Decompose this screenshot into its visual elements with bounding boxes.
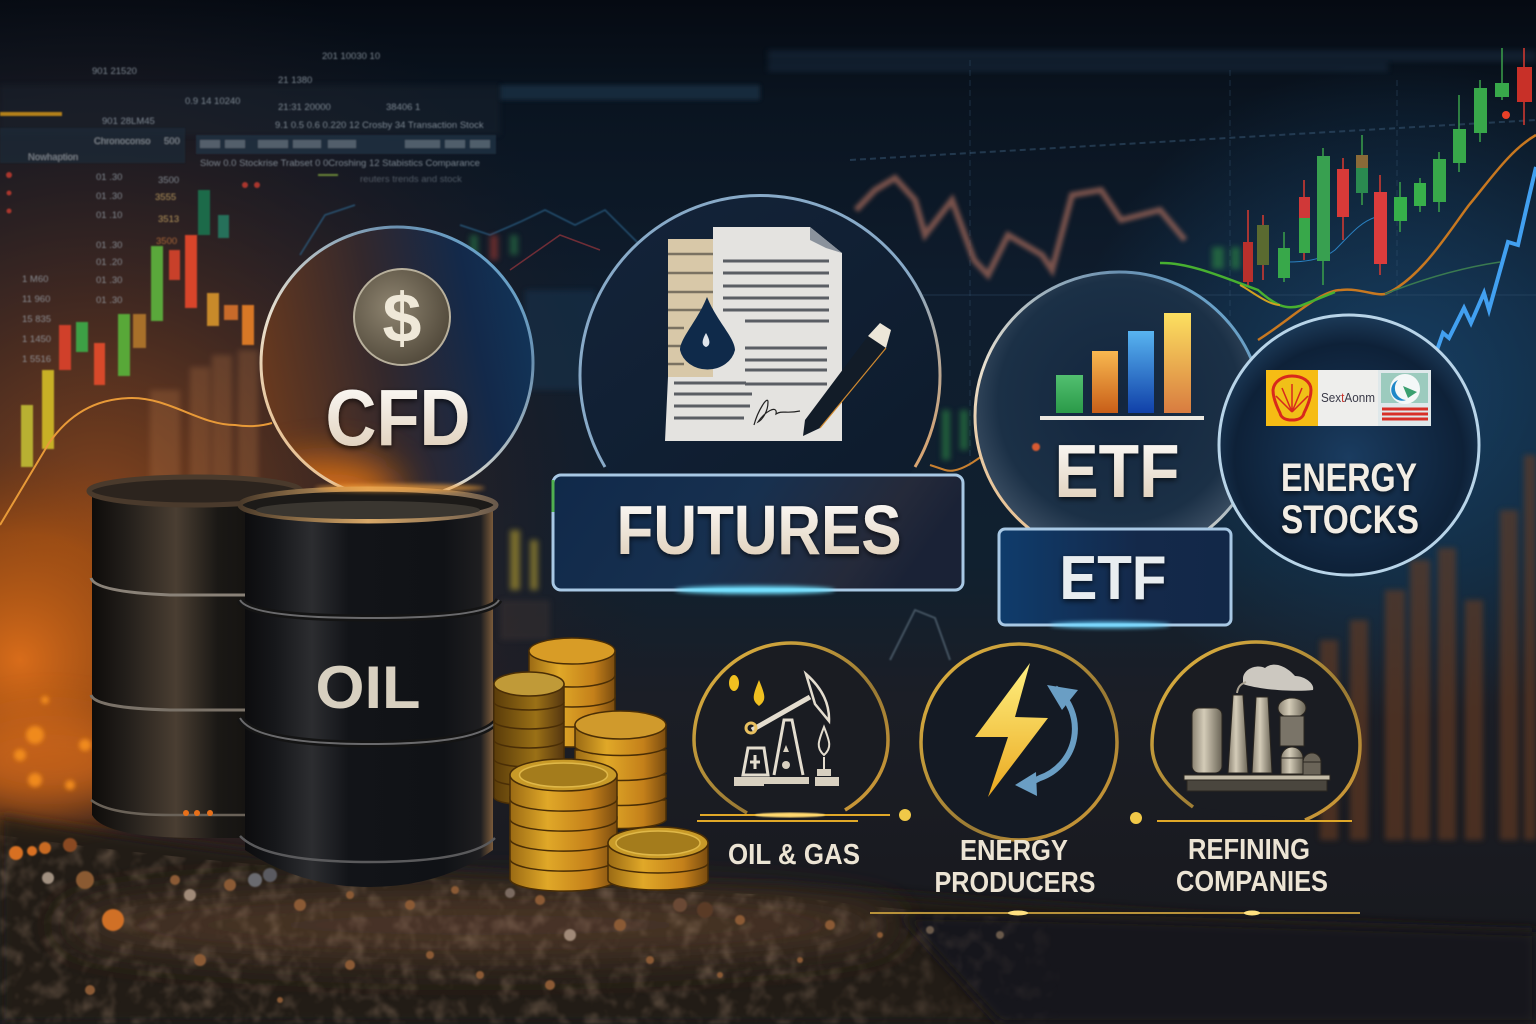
background data table: reuters trends and stock [360,174,462,185]
Refining companies label: REFINING [1188,834,1310,866]
background data table: 901 21520 [92,66,137,77]
background data table: 9.1 0.5 0.6 0.220 12 Crosby 34 Transaction Stock [275,120,484,131]
ETF label: ETF [1054,429,1180,513]
background data table: 1 1450 [22,334,51,345]
CFD circle [260,227,533,520]
background data table: Slow 0.0 Stockrise Trabset 0 0Croshing 12 Stabistics Comparance [200,158,480,169]
background data table: 3500 [156,236,177,247]
Oil and gas sector [694,643,911,871]
background bars left [150,350,258,507]
background data table: 201 10030 10 [322,51,380,62]
background data table: 21:31 20000 [278,102,331,113]
blue rising line [1437,167,1536,350]
icon: ETF bar chart [1040,313,1204,420]
Energy stocks label: ENERGY [1281,456,1417,500]
Energy producers label: ENERGY [960,835,1068,867]
Energy producers label: PRODUCERS [934,867,1096,899]
CFD label: CFD [326,373,470,462]
background data table: 3555 [155,192,176,203]
Energy stocks circle [1219,315,1479,575]
background data table: 500 [164,136,180,147]
candlestick chart top right [1243,48,1532,285]
icon: contract document with oil drop and pen [665,227,891,441]
logos strip: SextAonm [1321,390,1375,405]
background data table: 01 .30 [96,295,122,306]
background data table: 38406 1 [386,102,420,113]
icon: dollar coin: $ [383,279,421,357]
background data table: 15 835 [22,314,51,325]
background data table: 01 .30 [96,240,122,251]
Futures banner: FUTURES [616,491,902,569]
Refining companies sector [1130,642,1360,898]
background orange bars right [1320,455,1536,840]
Oil and gas label: OIL & GAS [728,839,860,871]
background mid candlesticks [470,235,1240,640]
ETF banner: ETF [1060,544,1166,613]
background data table: 01 .30 [96,172,122,183]
Refining companies label: COMPANIES [1176,866,1328,898]
background data table: 01 .30 [96,191,122,202]
Futures circle [580,195,940,480]
background data table: 01 .20 [96,257,122,268]
OIL label: OIL [316,654,420,721]
Energy stocks label: STOCKS [1281,498,1419,542]
background data table: 0.9 14 10240 [185,96,240,107]
background data table: 01 .30 [96,275,122,286]
ETF circle [975,272,1263,560]
logos strip [1266,370,1431,426]
background data table: 1 M60 [22,274,48,285]
Energy producers sector [921,644,1117,899]
Futures banner [553,475,963,594]
background data table: 3500 [158,175,179,186]
background data table: 1 5516 [22,354,51,365]
barrel back [89,477,301,838]
barrel front [240,484,499,887]
gold coin stacks [494,638,708,891]
icon: lightning bolt with arrow [975,663,1078,797]
background data table: 11 960 [22,294,50,305]
background data table: 3513 [158,214,179,225]
background candlesticks left [21,190,254,467]
background data table: 901 28LM45 [102,116,155,127]
background data table [0,51,496,365]
ground [0,696,1536,1024]
background data table: 01 .10 [96,210,122,221]
background data table: Chronoconso [94,136,151,147]
icon: oil pump [729,674,839,786]
icon: refinery [1184,665,1330,791]
background data table: 21 1380 [278,75,312,86]
bottom gold line [870,910,1360,916]
ETF banner [999,529,1231,628]
icon: dollar coin [354,269,450,365]
background line charts [0,135,1536,660]
background data table: Nowhaption [28,152,78,163]
